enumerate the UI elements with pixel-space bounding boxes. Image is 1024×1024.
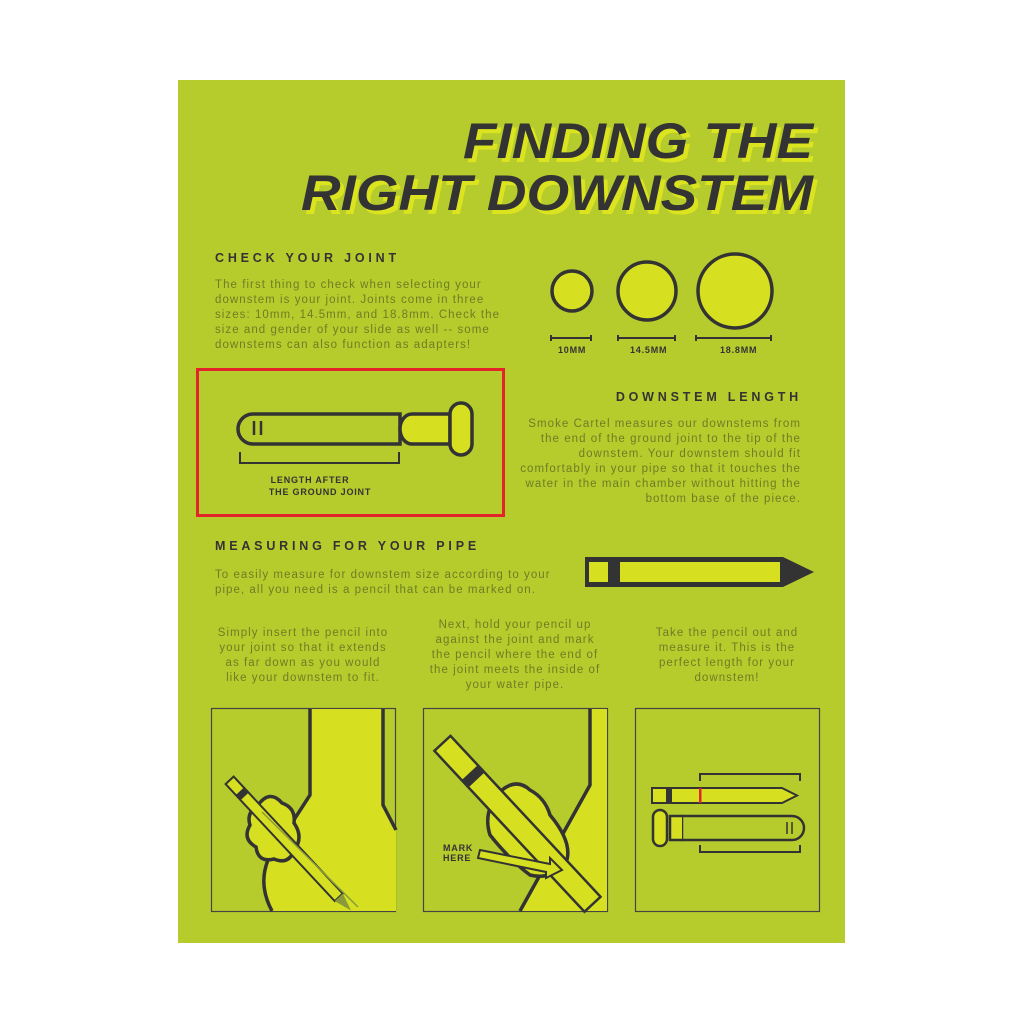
size labels: 14.5MM (630, 345, 667, 355)
panel: step 1 (212, 708, 396, 914)
text: measuring: pipe, all you need is a pencil that can be marked on. (215, 584, 536, 596)
heading: downstem length: DOWNSTEM LENGTH (616, 390, 802, 404)
step texts: Next, hold your pencil up (439, 619, 591, 631)
step texts: the pencil where the end of (432, 649, 598, 661)
panel: step 2: MARK (443, 843, 473, 853)
step texts: your joint so that it extends (219, 642, 387, 654)
arrow: mark here (478, 850, 562, 878)
highlight box: downstem illustration (198, 370, 504, 516)
text: measuring (215, 569, 551, 596)
text: check your joint: sizes: 10mm, 14.5mm, and 18.8mm. Check the (215, 309, 500, 321)
step texts: against the joint and mark (436, 634, 594, 646)
title (301, 113, 819, 225)
text: downstem length: water in the main chamber without hitting the (525, 478, 801, 490)
text: downstem length: comfortably in your pipe so that it touches the (520, 463, 801, 475)
text: check your joint (215, 279, 500, 351)
text: check your joint: The first thing to check when selecting your (215, 279, 482, 291)
step texts: as far down as you would (226, 657, 380, 669)
size labels: 18.8MM (720, 345, 757, 355)
title: RIGHT DOWNSTEM (305, 169, 818, 225)
step texts: your water pipe. (466, 679, 564, 691)
icon: pencil (585, 557, 814, 587)
icon: downstem (238, 403, 472, 463)
highlight box: downstem illustration: THE GROUND JOINT (269, 487, 371, 497)
text: downstem length: Smoke Cartel measures our downstems from (528, 418, 801, 430)
text: downstem length: downstem. Your downstem should fit (579, 448, 801, 460)
step texts: downstem! (694, 672, 760, 684)
step texts (218, 619, 798, 691)
background panel (178, 80, 845, 943)
text: downstem length: the end of the ground joint to the tip of the (541, 433, 801, 445)
step texts: perfect length for your (659, 657, 795, 669)
panel: step 2 (424, 708, 608, 912)
title: FINDING THE (467, 117, 819, 173)
size labels: 10MM (558, 345, 586, 355)
text: check your joint: downstems can also function as adapters! (215, 339, 471, 351)
title: FINDING THE (463, 113, 815, 169)
text: check your joint: size and gender of your slide as well -- some (215, 324, 490, 336)
panel: step 3 (636, 708, 820, 912)
step texts: measure it. This is the (659, 642, 795, 654)
heading: check your joint: CHECK YOUR JOINT (215, 251, 400, 265)
panel: step 2: HERE (443, 853, 471, 863)
text: downstem length (520, 418, 801, 505)
text: measuring: To easily measure for downstem size according to your (215, 569, 551, 581)
size labels (558, 345, 757, 355)
step texts: the joint meets the inside of (430, 664, 600, 676)
step texts: Simply insert the pencil into (218, 627, 388, 639)
joint size circles (551, 254, 772, 341)
text: downstem length: bottom base of the piece. (646, 493, 801, 505)
step texts: like your downstem to fit. (226, 672, 380, 684)
text: check your joint: downstem is your joint. Joints come in three (215, 294, 484, 306)
title: RIGHT DOWNSTEM (301, 165, 814, 221)
heading: measuring: MEASURING FOR YOUR PIPE (215, 539, 480, 553)
highlight box: downstem illustration: LENGTH AFTER (271, 475, 349, 485)
step texts: Take the pencil out and (656, 627, 798, 639)
